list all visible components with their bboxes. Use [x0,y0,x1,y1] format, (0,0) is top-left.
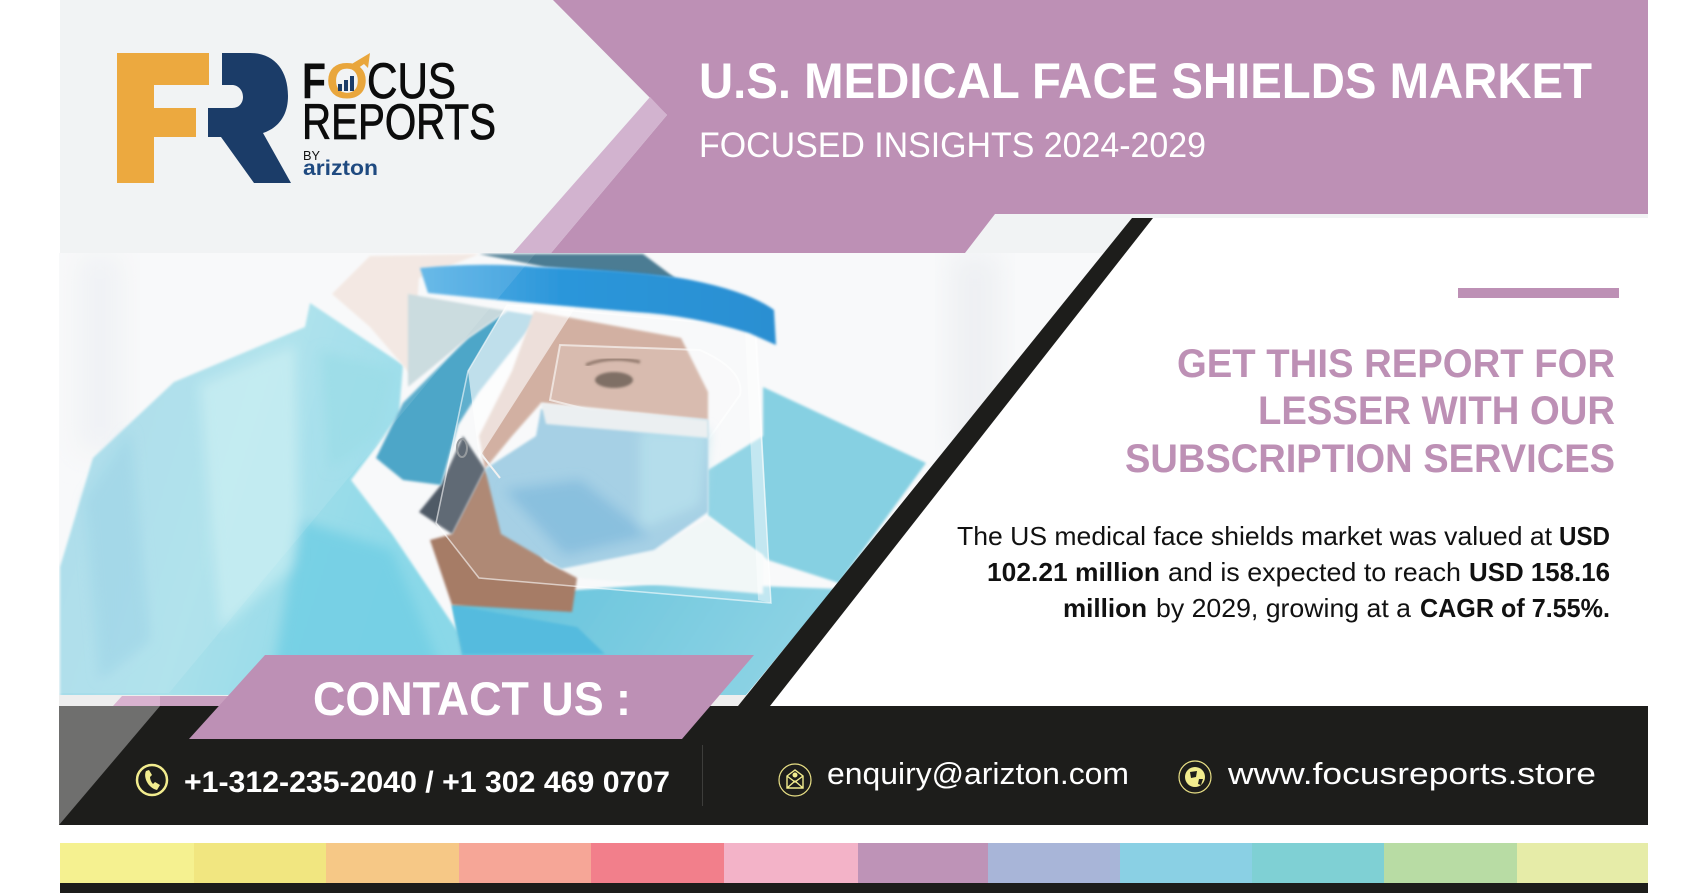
website: www.focusreports.store [1227,756,1596,791]
icon: globe [1179,761,1211,793]
gown: right arm [708,387,926,583]
black diagonal stripe [738,218,1153,706]
mask [485,409,708,569]
heading: subscription offer: SUBSCRIPTION SERVICES [1125,437,1615,481]
logo: by: BY [303,148,320,163]
photo background [59,253,1119,695]
logo wordmark: FOCUS: F [302,53,326,109]
icon: phone [137,765,167,795]
panel: logo header background [60,0,1648,253]
text block: market summary [957,521,1610,623]
text block: market summary: USD [1559,521,1610,551]
panel: photo of medical worker wearing a face shield [59,253,1015,695]
face shield [436,305,771,603]
logo wordmark: FOCUS: O [326,53,368,109]
contact label: CONTACT US : [313,672,631,725]
glove [332,254,479,376]
gown: torso and left arm [60,303,468,698]
hair cap: back [376,311,539,485]
phone numbers: +1-312-235-2040 / +1 302 469 0707 [184,766,670,799]
strip under photo [59,695,759,706]
logo wordmark: FOCUS [302,53,456,109]
heading: subscription offer: GET THIS REPORT FOR [1177,342,1615,386]
pink strip continuation [160,696,240,706]
gown: chest [452,583,839,698]
bottom black bar [60,883,1648,893]
face [479,311,708,469]
hair cap: upper translucent [408,294,507,387]
text block: market summary: and is expected to reach [1168,557,1461,587]
mask top band [541,403,708,438]
shield reflection [468,305,577,458]
text block: market summary: The US medical face shields market was valued at [957,521,1553,551]
text block: market summary: by 2029, growing at a [1156,593,1412,623]
subtitle: FOCUSED INSIGHTS 2024-2029 [699,126,1206,165]
hair [419,436,485,534]
mask folds [505,430,708,555]
eye [595,372,633,388]
color strip [60,843,1648,883]
panel: black contact band [59,706,1648,825]
neck [430,469,577,612]
light chevron stripe [513,97,667,253]
eyebrow [586,359,640,365]
text block: market summary: million [1063,593,1147,623]
light overlay [59,253,536,693]
text block: market summary: CAGR of 7.55%. [1420,593,1610,623]
contact banner [189,655,754,739]
text block: market summary: USD 158.16 [1469,557,1610,587]
gray corner triangle [59,706,160,825]
white gap below mask [644,530,764,595]
title: U.S. MEDICAL FACE SHIELDS MARKET [699,53,1592,109]
panel: white text area [770,218,1648,706]
email address: enquiry@arizton.com [827,756,1129,791]
logo wordmark: FOCUS: CUS [367,53,456,109]
logo mark: R [208,53,291,183]
shield right edge [750,425,771,603]
logo wordmark: REPORTS: REPORTS [302,94,496,150]
gown: sleeve folds [89,348,436,670]
visor band [420,265,776,345]
earring [457,439,467,457]
icon: email [779,764,811,796]
panel: title banner [551,0,1648,253]
heading: subscription offer: LESSER WITH OUR [1258,389,1615,433]
logo [117,53,496,183]
hair cap: top [479,254,675,278]
logo: arizton: arizton [303,157,378,180]
heading: subscription offer [1125,342,1615,481]
collar [452,605,605,654]
light pink strip [113,696,240,706]
divider [702,745,703,806]
accent bar [1458,288,1619,298]
mask ear loop [478,450,500,478]
safety glasses [549,344,708,418]
text block: market summary: 102.21 million [987,557,1160,587]
logo mark: F [117,53,209,183]
